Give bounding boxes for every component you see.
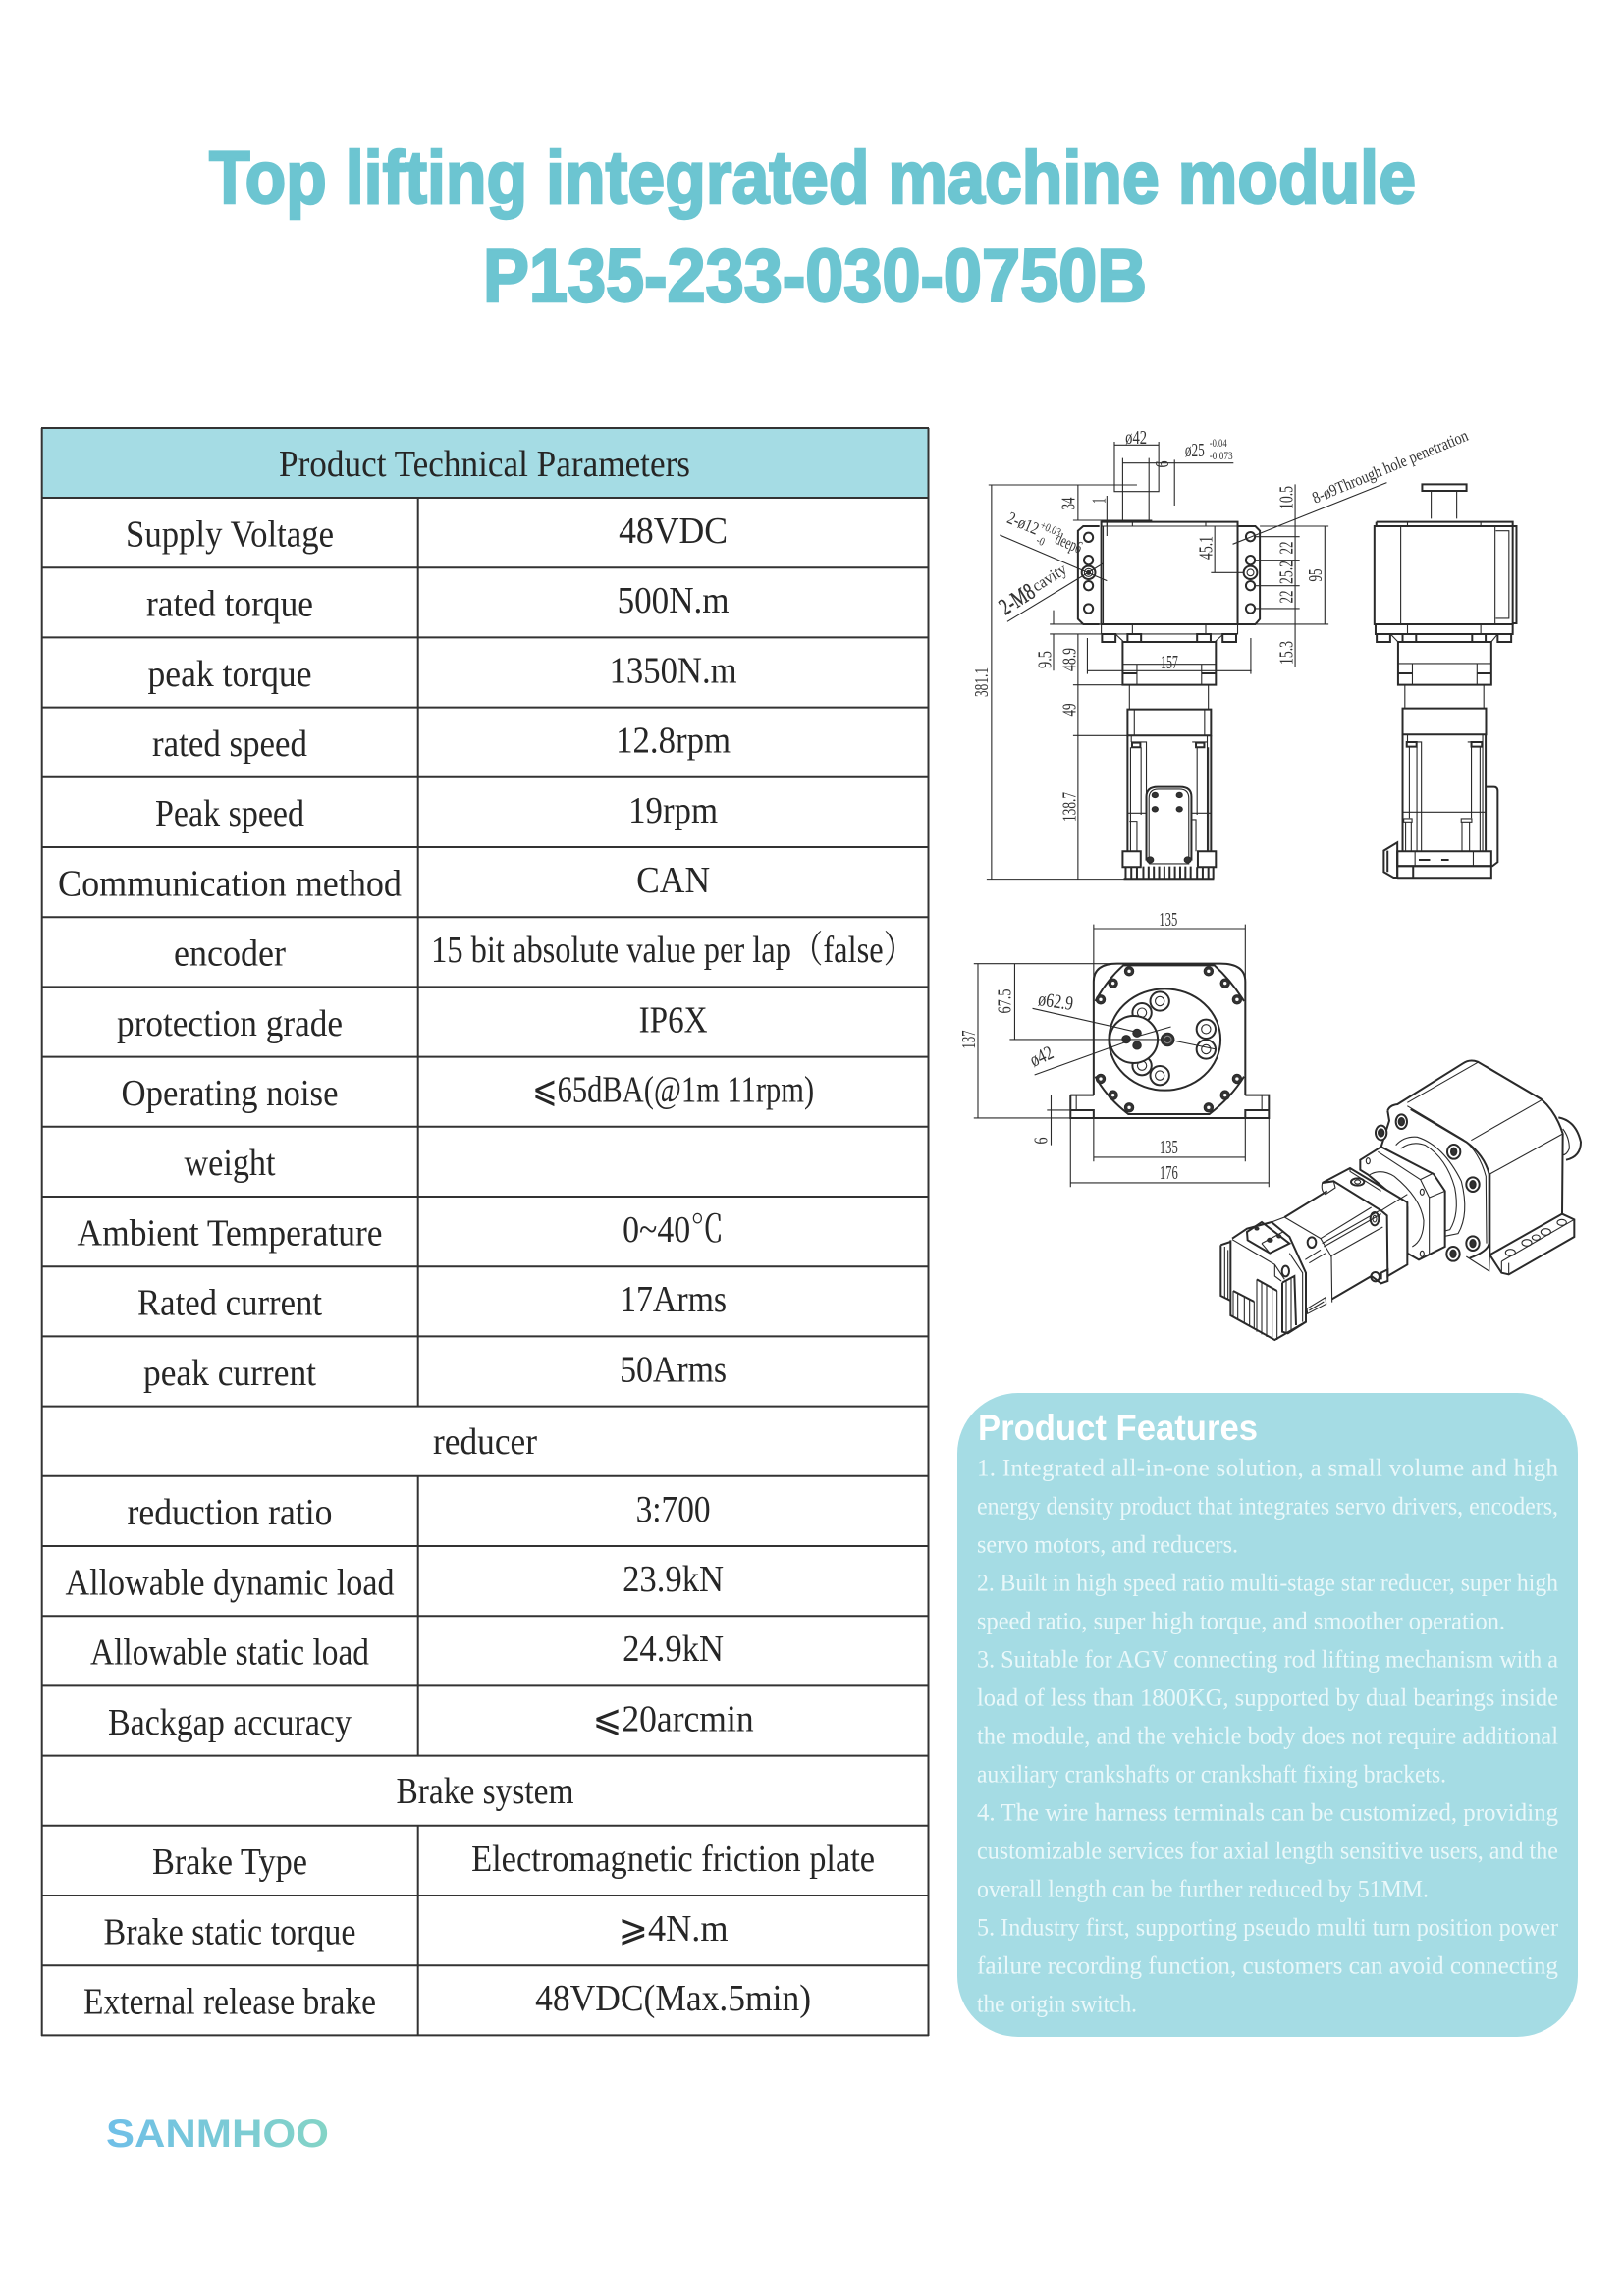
row: protection grade: IP6X xyxy=(639,999,708,1041)
row: Ambient Temperature xyxy=(77,1209,724,1254)
row: peak torque: peak torque xyxy=(147,654,312,695)
dimension labels: front view: 34 xyxy=(1057,497,1079,509)
dimension labels: flange view: 6 xyxy=(1031,1137,1053,1145)
technical drawing: side view xyxy=(1375,484,1516,878)
row: Supply Voltage: 48VDC xyxy=(619,510,728,552)
dimension labels: flange view: 176 xyxy=(1160,1162,1178,1184)
dimension labels: front view: 8-ø9Through hole penetration xyxy=(1309,426,1471,507)
dimension labels: front view: ø25 xyxy=(1185,440,1205,461)
dimension labels: front view: 381.1 xyxy=(971,667,993,697)
row: Rated current: 17Arms xyxy=(620,1279,727,1320)
row: Allowable dynamic load: 23.9kN xyxy=(623,1559,724,1600)
dimension labels: flange view: 135 xyxy=(1159,909,1177,931)
dimension labels: flange view: 135 xyxy=(1160,1137,1178,1158)
dimension labels: flange view xyxy=(958,909,1178,1184)
row: Brake Type: Brake Type xyxy=(152,1842,307,1883)
row: Brake static torque: Brake static torque xyxy=(104,1911,355,1952)
dimension labels: front view: 9.5 xyxy=(1035,651,1056,668)
row: rated speed: rated speed xyxy=(152,723,307,765)
dimension labels: front view xyxy=(971,426,1471,822)
dimension labels: front view: 22 xyxy=(1275,542,1297,554)
row: peak torque xyxy=(147,650,737,695)
features text: 3. Suitable for AGV connecting rod lifting mechanism with a xyxy=(977,1647,1558,1673)
row: peak torque: 1350N.m xyxy=(610,650,737,691)
features text: 2. Built in high speed ratio multi-stage star reducer, super high xyxy=(977,1571,1558,1596)
title: Top lifting integrated machine module xyxy=(209,136,1416,220)
title xyxy=(209,136,1416,318)
dimension labels: front view: 45.1 xyxy=(1196,536,1218,560)
features text: speed ratio, super high torque, and smoother operation. xyxy=(977,1608,1505,1635)
dimension labels: front view: +0.03 xyxy=(1038,518,1063,539)
row: Allowable dynamic load xyxy=(65,1559,724,1603)
row: Peak speed: Peak speed xyxy=(155,793,304,834)
row: Communication method xyxy=(58,860,710,904)
row: protection grade xyxy=(117,999,708,1044)
features text: 1. Integrated all-in-one solution, a small volume and high xyxy=(977,1455,1559,1482)
row: Communication method: Communication method xyxy=(58,863,402,904)
dimension labels: front view: 22 xyxy=(1275,591,1297,603)
isometric product illustration xyxy=(1220,1060,1581,1340)
row: Allowable static load: Allowable static load xyxy=(90,1632,369,1674)
dimension labels: front view: 138.7 xyxy=(1058,792,1080,822)
logo: SANMHOO: SANMHOO xyxy=(106,2112,329,2156)
row: protection grade: protection grade xyxy=(117,1003,343,1044)
dimension labels: flange view: 137 xyxy=(958,1030,980,1048)
technical drawing: flange view with dimensions xyxy=(958,909,1269,1187)
features text: 5. Industry first, supporting pseudo multi turn position power xyxy=(977,1914,1559,1942)
features text: the origin switch. xyxy=(977,1991,1137,2018)
dimension labels: front view: -0 xyxy=(1034,533,1047,549)
dimension labels: front view: 2-M8 xyxy=(995,579,1040,620)
dimension labels: front view: 95 xyxy=(1305,568,1326,581)
title: P135-233-030-0750B xyxy=(483,235,1147,318)
row: encoder: encoder xyxy=(174,934,286,975)
dimension labels: front view: 1 xyxy=(1088,498,1110,504)
row: Peak speed xyxy=(155,790,718,834)
row: peak current xyxy=(143,1349,727,1394)
row: Brake static torque xyxy=(104,1908,729,1952)
features text: auxiliary crankshafts or crankshaft fixing brackets. xyxy=(977,1761,1446,1789)
row: peak current: 50Arms xyxy=(620,1349,727,1390)
row: Ambient Temperature: Ambient Temperature xyxy=(77,1212,383,1254)
row: peak current: peak current xyxy=(143,1353,316,1394)
row: encoder: 15 bit absolute value per lap（false） xyxy=(431,930,915,971)
table header xyxy=(42,428,928,498)
dimension labels: front view: 49 xyxy=(1058,703,1080,716)
technical drawing: front view with dimensions xyxy=(971,426,1471,880)
features text: the module, and the vehicle body does not require additional xyxy=(977,1724,1558,1749)
row: Brake Type xyxy=(152,1839,875,1883)
row: rated torque xyxy=(146,580,730,625)
dimension labels: flange view: ø42 xyxy=(1026,1041,1056,1072)
dimension labels: front view: ø42 xyxy=(1125,427,1147,449)
row: Ambient Temperature: 0~40℃ xyxy=(623,1209,724,1251)
panel: product features xyxy=(957,1393,1578,2037)
dimension labels: front view: cavity xyxy=(1029,560,1070,595)
row: rated torque: 500N.m xyxy=(618,580,730,621)
dimension labels: front view: deep6 xyxy=(1053,528,1085,558)
row: rated speed: 12.8rpm xyxy=(616,721,731,762)
dimension labels: front view: 2-ø12 xyxy=(1004,507,1042,539)
features heading: Product Features xyxy=(978,1408,1258,1448)
row: reduction ratio xyxy=(128,1489,711,1533)
row: Allowable static load: 24.9kN xyxy=(623,1629,724,1670)
row: Backgap accuracy: Backgap accuracy xyxy=(108,1702,352,1743)
section row: reducer: reducer xyxy=(433,1421,537,1463)
features text: load of less than 1800KG, supported by dual bearings inside xyxy=(977,1684,1558,1712)
row: weight: weight xyxy=(185,1143,276,1184)
row: Supply Voltage xyxy=(126,510,728,555)
table header: Product Technical Parameters xyxy=(279,444,690,485)
dimension labels: front view: -0.04 xyxy=(1210,436,1227,450)
features text: energy density product that integrates servo drivers, encoders, xyxy=(977,1494,1558,1520)
features text: servo motors, and reducers. xyxy=(977,1531,1238,1559)
row: reduction ratio: reduction ratio xyxy=(128,1492,332,1533)
section row: Brake system: Brake system xyxy=(397,1771,573,1812)
dimension labels: front view: 48.9 xyxy=(1058,648,1080,671)
row: Operating noise: Operating noise xyxy=(122,1073,338,1114)
features text: 4. The wire harness terminals can be customized, providing xyxy=(977,1800,1558,1826)
dimension labels: front view: 157 xyxy=(1161,652,1178,673)
row: Rated current: Rated current xyxy=(137,1283,322,1324)
row: rated torque: rated torque xyxy=(146,584,313,625)
row: Communication method: CAN xyxy=(636,860,710,901)
row: reduction ratio: 3:700 xyxy=(636,1489,711,1530)
row: encoder xyxy=(174,930,915,975)
row: rated speed xyxy=(152,721,731,765)
row: Allowable dynamic load: Allowable dynamic load xyxy=(65,1562,395,1603)
row: External release brake: 48VDC(Max.5min) xyxy=(535,1978,811,2019)
features text: failure recording function, customers can avoid connecting xyxy=(977,1953,1558,1979)
panel: product technical parameters table xyxy=(41,428,929,2036)
row: Peak speed: 19rpm xyxy=(628,790,718,831)
dimension labels: front view: 15.3 xyxy=(1275,641,1297,665)
row: Backgap accuracy xyxy=(108,1698,754,1743)
dimension labels: front view: 10.5 xyxy=(1275,486,1297,509)
row: Brake Type: Electromagnetic friction plate xyxy=(471,1839,875,1880)
row: Backgap accuracy: ⩽20arcmin xyxy=(593,1698,754,1739)
features text xyxy=(977,1455,1559,2018)
row: Brake static torque: ⩾4N.m xyxy=(619,1908,729,1949)
row: Supply Voltage: Supply Voltage xyxy=(126,513,334,555)
row: External release brake: External release brake xyxy=(83,1982,376,2023)
dimension labels: front view: 25.2 xyxy=(1275,561,1297,584)
dimension labels: flange view: 67.5 xyxy=(995,988,1016,1013)
dimension labels: front view: -0.073 xyxy=(1210,449,1233,462)
row: External release brake xyxy=(83,1978,811,2023)
dimension labels: flange view: ø62.9 xyxy=(1037,988,1074,1015)
row: Rated current xyxy=(137,1279,727,1324)
row: Operating noise xyxy=(122,1070,814,1114)
features text: overall length can be further reduced by 51MM. xyxy=(977,1877,1429,1902)
row: Operating noise: ⩽65dBA(@1m 11rpm) xyxy=(532,1070,814,1111)
row: Allowable static load xyxy=(90,1629,724,1674)
dimension labels: front view: 6 xyxy=(1152,460,1173,467)
features text: customizable services for axial length sensitive users, and the xyxy=(977,1838,1558,1865)
